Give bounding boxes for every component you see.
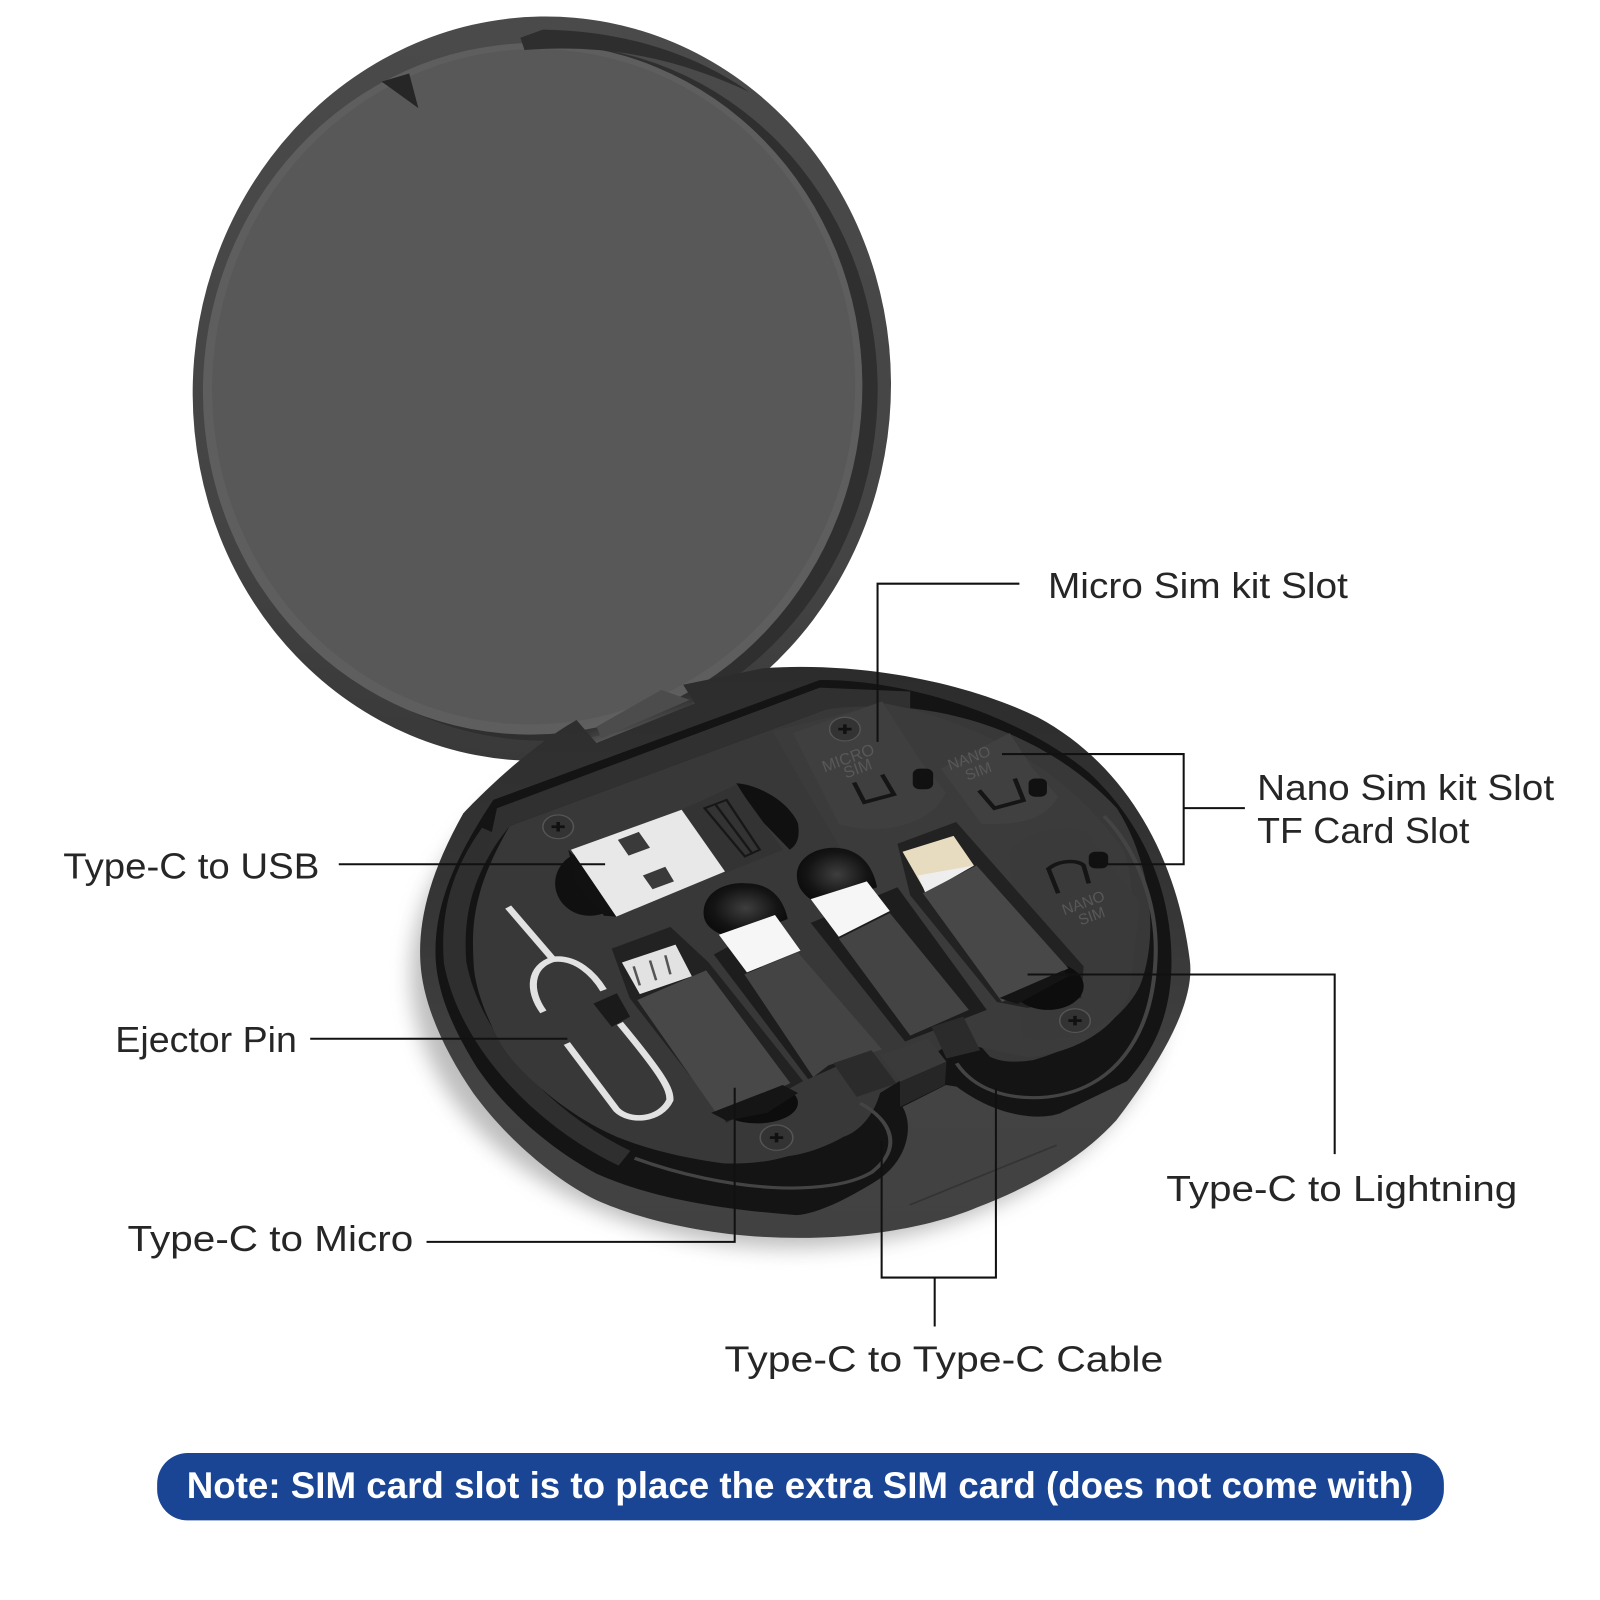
note banner [157, 1453, 1444, 1520]
label: Type-C to USB: Type-C to USB [63, 847, 319, 887]
SIM slot labels on tray: NANO [946, 743, 993, 774]
SIM slot labels on tray: MICRO [820, 741, 877, 776]
ridge band [487, 688, 910, 856]
label: Type-C to Micro: Type-C to Micro [128, 1219, 413, 1259]
ejector pin [508, 907, 670, 1118]
sim flaps [793, 701, 946, 829]
leader lines [310, 584, 1335, 1327]
SIM slot labels on tray: SIM [1076, 904, 1108, 929]
SIM slot labels on tray: SIM [963, 759, 994, 784]
cable cavity [435, 680, 1171, 1215]
case base with tray and accessories [411, 667, 1190, 1248]
clip on pin [593, 993, 630, 1027]
hinge [596, 690, 690, 738]
SIM slot labels on tray [820, 741, 1108, 929]
type-c adapter A [719, 915, 801, 972]
tray floor [473, 706, 1150, 1164]
label: Ejector Pin: Ejector Pin [115, 1020, 297, 1060]
note banner: Note: SIM card slot is to place the extra SIM card (does not come with) [187, 1465, 1413, 1506]
micro adapter [622, 945, 692, 994]
cable gloss [635, 1103, 890, 1188]
label: Micro Sim kit Slot: Micro Sim kit Slot [1048, 566, 1348, 606]
ground shadow [411, 701, 1170, 1248]
lightning adapter [903, 836, 974, 887]
screws [543, 717, 1090, 1150]
sim panel [772, 703, 1134, 1057]
label: Nano Sim kit Slot: Nano Sim kit Slot [1257, 768, 1554, 808]
USB cradle [736, 783, 799, 850]
type-c cups [704, 883, 788, 939]
SIM slot labels on tray: SIM [841, 755, 875, 782]
lid notch [382, 73, 418, 108]
label: Type-C to Lightning: Type-C to Lightning [1166, 1169, 1517, 1209]
label: Type-C to Type-C Cable: Type-C to Type-C Cable [724, 1339, 1163, 1379]
outer shell [420, 667, 1190, 1238]
sim clips [854, 775, 894, 802]
label: TF Card Slot: TF Card Slot [1257, 811, 1469, 851]
left cable mid band [454, 832, 624, 1158]
center block [880, 1038, 946, 1082]
lower lip line [910, 1145, 1057, 1205]
type-c adapter B [811, 881, 890, 937]
adapter channels [612, 927, 803, 1123]
open lid of case [162, 0, 922, 790]
SIM slot labels on tray: NANO [1060, 888, 1107, 919]
lid groove [520, 30, 749, 92]
cable strain reliefs [833, 1050, 896, 1097]
USB connector [682, 785, 783, 873]
